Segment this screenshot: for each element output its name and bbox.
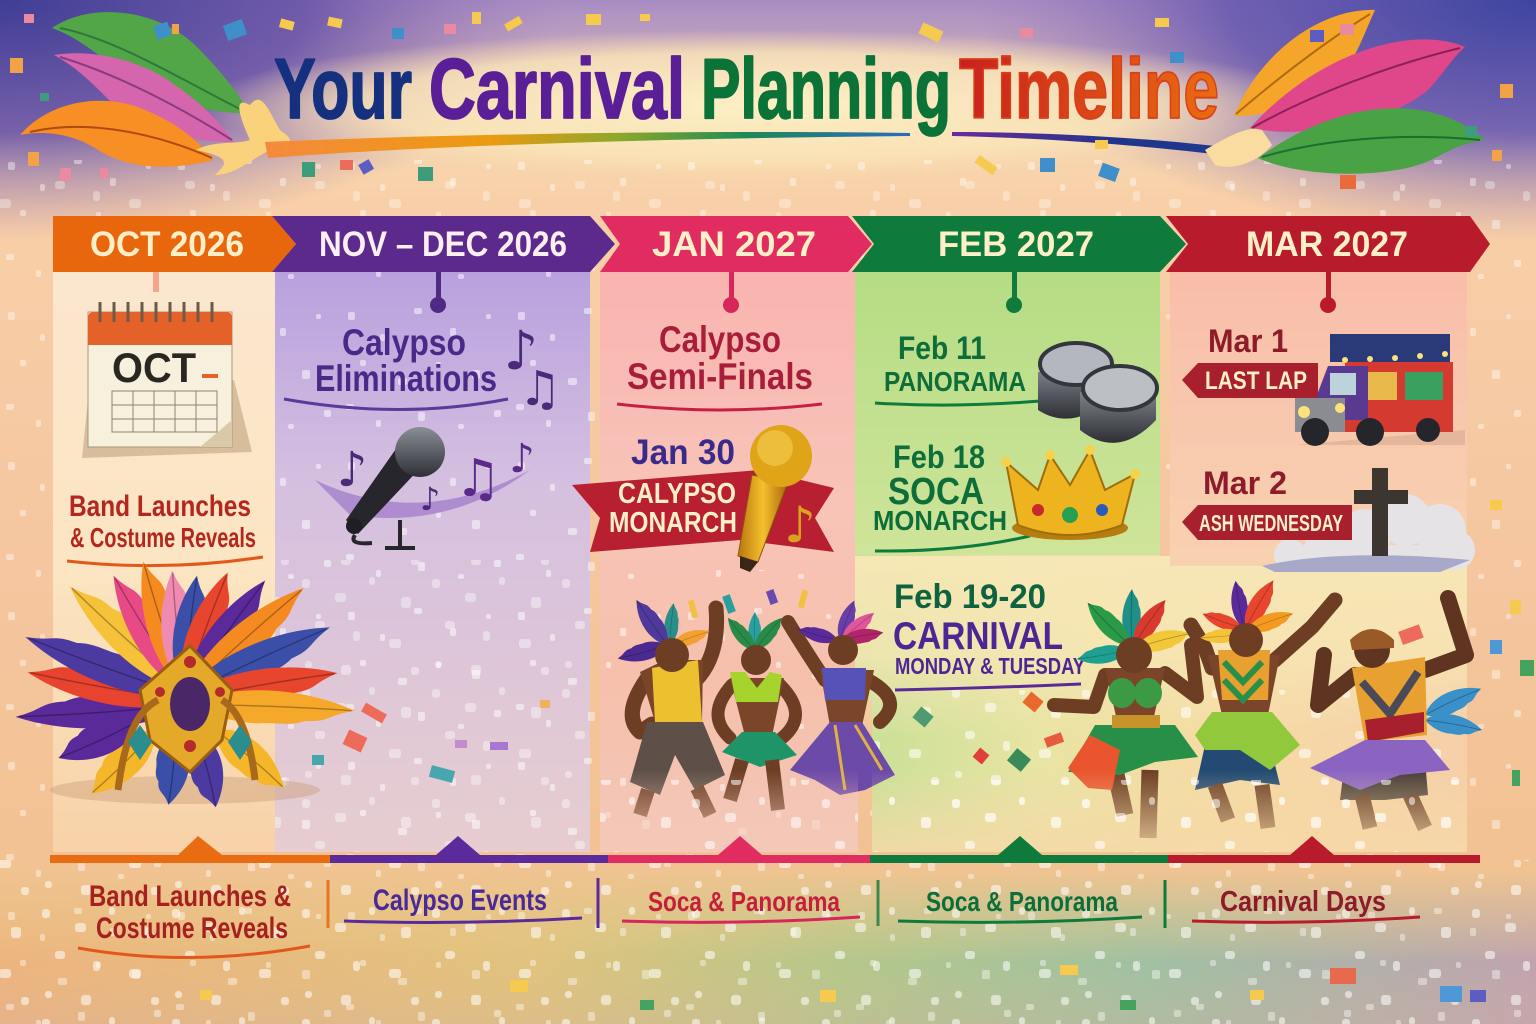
text: calypso eliminations: Calypso: [342, 322, 466, 363]
text: calypso semi-finals: Calypso: [659, 319, 781, 360]
label: band launches: Band Launches &: [89, 880, 291, 913]
icon: music notes bottom: ♪: [337, 442, 367, 498]
icon: feather headdress: [14, 557, 356, 811]
icon: cross and clouds: [1262, 468, 1475, 572]
icon: calendar: OCT: [112, 344, 196, 391]
panel: October column: [53, 270, 275, 852]
text: carnival Monday and Tuesday: MONDAY & TUESDAY: [895, 653, 1085, 679]
title: [274, 42, 1219, 137]
icon: truck: [1295, 334, 1465, 446]
icon: microphone: [315, 427, 530, 548]
icon: music notes bottom: ♫: [455, 449, 501, 509]
arrow: Feb 2027: FEB 2027: [938, 225, 1094, 264]
icon: music notes top: ♫: [518, 361, 562, 417]
icon: gold microphone: ♪: [784, 496, 816, 554]
arrow: Nov-Dec 2026: [272, 216, 615, 272]
text: band launches: [67, 490, 263, 566]
title underline swoosh: [265, 132, 1232, 158]
timeline pins: [153, 272, 1336, 313]
label: calypso events: Calypso Events: [373, 884, 547, 917]
icon: music notes top: [504, 319, 562, 417]
text: Feb 18 soca monarch: Feb 18: [893, 439, 985, 475]
arrow: Oct 2026: [53, 216, 296, 272]
arrow: Oct 2026: OCT 2026: [90, 225, 244, 264]
text: Feb 18 soca monarch: [873, 439, 1030, 551]
text: calypso eliminations: Eliminations: [315, 358, 497, 399]
text: calypso semi-finals: Semi-Finals: [627, 356, 813, 397]
arrow: Jan 2027: [600, 216, 872, 272]
text: Feb 18 soca monarch: MONARCH: [873, 505, 1007, 536]
label: band launches: [78, 880, 310, 958]
text: Feb 18 soca monarch: SOCA: [888, 471, 984, 513]
bottom timeline bar: [50, 836, 1480, 863]
icon: music notes top: ♪: [504, 319, 538, 382]
text: band launches: & Costume Reveals: [70, 522, 256, 553]
title: Planning: [701, 42, 951, 137]
title: Your: [274, 42, 412, 137]
text: Mar 1: Mar 1: [1208, 323, 1288, 359]
icon: gold crown: [1001, 445, 1140, 540]
arrow: Mar 2027: [1166, 216, 1490, 272]
arrow: Feb 2027: [852, 216, 1186, 272]
header arrows: [53, 216, 1490, 272]
text: Mar 2: Mar 2: [1203, 465, 1287, 501]
text: carnival Monday and Tuesday: CARNIVAL: [893, 615, 1063, 658]
icon: music notes bottom: ♪: [420, 480, 440, 518]
label: carnival days: Carnival Days: [1220, 886, 1386, 918]
icon: gold microphone: [738, 425, 816, 572]
dancer: yellow top: [616, 595, 725, 815]
text: Jan 30: Jan 30: [631, 433, 735, 472]
panel: January column: [600, 270, 858, 852]
label: soca and panorama february: Soca & Panorama: [926, 886, 1118, 917]
icon: music notes bottom: ♪: [509, 436, 535, 482]
panel: November-December column: [275, 270, 590, 852]
text: calypso eliminations: [284, 322, 508, 410]
tag: ash wednesday: [1182, 505, 1352, 540]
text: Feb 11 panorama: Feb 11: [898, 330, 986, 366]
dancer leg fades: [600, 770, 1467, 852]
label: soca and panorama january: [622, 886, 860, 922]
ribbon: calypso monarch: MONARCH: [609, 507, 737, 539]
text: carnival Monday and Tuesday: Feb 19-20: [894, 578, 1046, 616]
panel: February top: [855, 270, 1160, 555]
text: Feb 11 panorama: PANORAMA: [884, 366, 1026, 397]
arrow: Jan 2027: JAN 2027: [652, 225, 816, 264]
ribbon: calypso monarch: [572, 470, 834, 552]
text: carnival Monday and Tuesday: [893, 578, 1085, 690]
tag: last lap: [1182, 363, 1318, 398]
title: Timeline: [959, 42, 1219, 137]
dancer: zigzag top man: [1191, 576, 1335, 828]
top feathers left: [20, 12, 290, 175]
dancer: green bikini: [718, 612, 797, 810]
dancer: headband man: [1310, 598, 1485, 828]
tag: ash wednesday: ASH WEDNESDAY: [1199, 510, 1343, 536]
arrow: Nov-Dec 2026: NOV – DEC 2026: [319, 225, 567, 264]
tag: last lap: LAST LAP: [1205, 367, 1307, 395]
panel: Carnival days lower: [855, 555, 1467, 852]
icon: music notes bottom: [337, 436, 535, 518]
dancer: green feathered woman: [1054, 589, 1198, 838]
text: calypso semi-finals: [617, 319, 822, 410]
icon: calendar: [82, 302, 252, 458]
arrow: Mar 2027: MAR 2027: [1246, 225, 1408, 264]
bottom separators: [328, 878, 1165, 928]
text: band launches: Band Launches: [69, 490, 251, 523]
dancer: purple skirt: [788, 598, 895, 795]
label: band launches: Costume Reveals: [96, 912, 288, 945]
label: soca and panorama january: Soca & Panorama: [648, 886, 840, 917]
ribbon: calypso monarch: CALYPSO: [618, 478, 736, 510]
text: Feb 11 panorama: [875, 330, 1040, 405]
title: Carnival: [429, 42, 685, 137]
top feathers right: [1205, 10, 1485, 174]
panel: March top: [1170, 270, 1467, 566]
icon: steel drums: [1038, 343, 1157, 443]
